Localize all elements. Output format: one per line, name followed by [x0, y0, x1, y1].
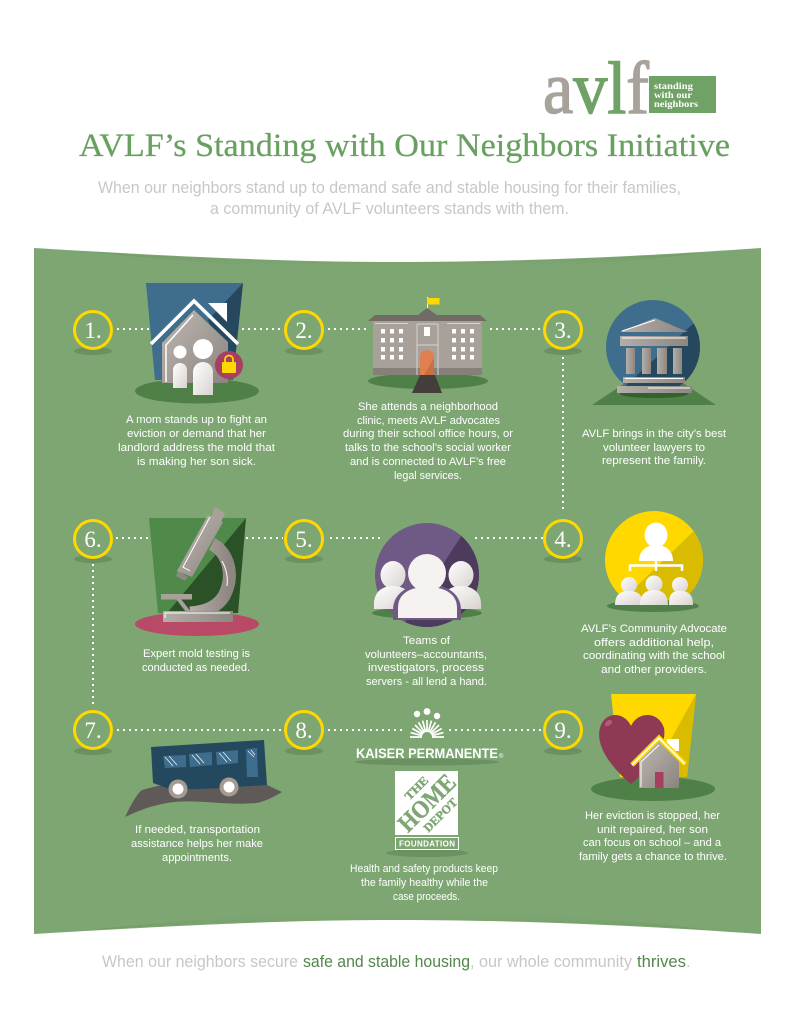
step 8 number: [285, 712, 323, 755]
text: step 5: investigators, process: [368, 662, 484, 674]
footer statement: .: [686, 952, 691, 971]
step 5 number: [285, 520, 323, 563]
logo: The Home Depot Foundation: THE: [402, 773, 431, 803]
icon: microscope: [135, 507, 259, 636]
text: step 4: [581, 623, 727, 676]
subtitle: When our neighbors stand up to demand safe and stable housing for their families,: [98, 178, 681, 197]
step 2 number: [285, 312, 323, 355]
text: step 1: landlord address the mold that: [118, 442, 276, 454]
text: step 9: can focus on school – and a: [583, 837, 722, 849]
text: step 1: A mom stands up to fight an: [126, 414, 267, 426]
footer statement: [102, 952, 691, 971]
text: step 3: volunteer lawyers to: [603, 442, 705, 454]
icon: bus on road: [125, 740, 282, 817]
logo: avlf standing with our neighbors: neighbors: [654, 100, 698, 110]
logo: avlf standing with our neighbors: with our: [654, 91, 693, 101]
text: step 1: [118, 414, 276, 468]
text: step 2: and is connected to AVLF’s free: [350, 456, 506, 468]
text: step 2: clinic, meets AVLF advocates: [357, 415, 500, 427]
step 2 number: 2.: [295, 318, 313, 343]
text: step 5: Teams of: [403, 635, 451, 647]
text: step 4: coordinating with the school: [583, 650, 725, 662]
icon: community advocate organisation chart: [605, 511, 710, 612]
text: step 9: [579, 810, 727, 863]
dotted connector lines: [93, 329, 563, 730]
logo: The Home Depot Foundation: HOME: [393, 769, 462, 838]
logo: The Home Depot Foundation: [385, 761, 469, 857]
step 9 number: 9.: [554, 718, 572, 743]
logo: avlf standing with our neighbors: [543, 48, 716, 130]
text: step 1: is making her son sick.: [137, 456, 256, 468]
step 6 number: [74, 520, 112, 563]
step 9 number: [544, 712, 582, 755]
text: step 5: volunteers–accountants,: [365, 649, 487, 661]
text: step 4: and other providers.: [601, 664, 707, 676]
footer statement: safe and stable housing: [303, 952, 470, 971]
text: step 6: conducted as needed.: [142, 662, 250, 674]
logo: Kaiser Permanente: [355, 708, 504, 766]
step 4 number: 4.: [554, 527, 572, 552]
text: step 2: during their school office hours, or: [343, 428, 513, 440]
text: step 3: [582, 428, 727, 467]
footer statement: When our neighbors secure: [102, 952, 298, 971]
icon: heart and house: [591, 694, 715, 801]
text: step 7: [131, 824, 263, 864]
text: step 4: AVLF’s Community Advocate: [581, 623, 727, 635]
text: step 4: offers additional help,: [594, 637, 714, 649]
subtitle: [98, 178, 681, 218]
text: step 8: [350, 863, 498, 903]
step 5 number: 5.: [295, 527, 313, 552]
step 4 number: [544, 520, 582, 563]
text: step 2: legal services.: [394, 470, 462, 482]
title: AVLF’s Standing with Our Neighbors Initiative: [79, 128, 730, 164]
text: step 3: represent the family.: [602, 455, 706, 467]
logo: avlf standing with our neighbors: standing: [654, 82, 693, 92]
icon: courthouse: [592, 300, 716, 405]
text: step 2: [343, 401, 513, 482]
step 7 number: [74, 712, 112, 755]
footer statement: , our whole community: [470, 952, 632, 971]
text: step 6: Expert mold testing is: [143, 648, 250, 660]
text: step 7: assistance helps her make: [131, 838, 263, 850]
text: step 8: the family healthy while the: [361, 877, 488, 889]
footer statement: thrives: [637, 952, 686, 971]
logo: Kaiser Permanente: ®: [499, 753, 504, 760]
text: step 3: AVLF brings in the city’s best: [582, 428, 727, 440]
logo: The Home Depot Foundation: DEPOT: [421, 795, 460, 835]
logo: The Home Depot Foundation: FOUNDATION: [399, 840, 455, 848]
text: step 1: eviction or demand that her: [127, 428, 266, 440]
icon: house with family and lock: [135, 283, 259, 404]
text: step 7: If needed, transportation: [135, 824, 260, 836]
step 1 number: [74, 312, 112, 355]
step 3 number: 3.: [554, 318, 572, 343]
subtitle: a community of AVLF volunteers stands with them.: [210, 199, 569, 218]
text: step 7: appointments.: [162, 852, 232, 864]
text: step 5: [365, 635, 487, 688]
logo: Kaiser Permanente: KAISER PERMANENTE: [356, 745, 498, 761]
icon: school building: [368, 297, 488, 393]
text: step 8: Health and safety products keep: [350, 863, 498, 875]
text: step 9: Her eviction is stopped, her: [585, 810, 720, 822]
step 1 number: 1.: [84, 318, 102, 343]
text: step 5: servers - all lend a hand.: [366, 676, 487, 688]
text: step 6: [142, 648, 250, 674]
step 3 number: [544, 312, 582, 355]
step 7 number: 7.: [84, 718, 102, 743]
text: step 9: unit repaired, her son: [597, 824, 708, 836]
step 8 number: 8.: [295, 718, 313, 743]
icon: team of volunteers: [372, 523, 490, 630]
text: step 2: talks to the school’s social worker: [345, 442, 511, 454]
text: step 2: She attends a neighborhood: [358, 401, 498, 413]
logo: avlf standing with our neighbors: avlf: [543, 48, 649, 130]
step 6 number: 6.: [84, 527, 102, 552]
text: step 8: case proceeds.: [393, 891, 460, 903]
panel: green background: [34, 248, 761, 934]
text: step 9: family gets a chance to thrive.: [579, 851, 727, 863]
